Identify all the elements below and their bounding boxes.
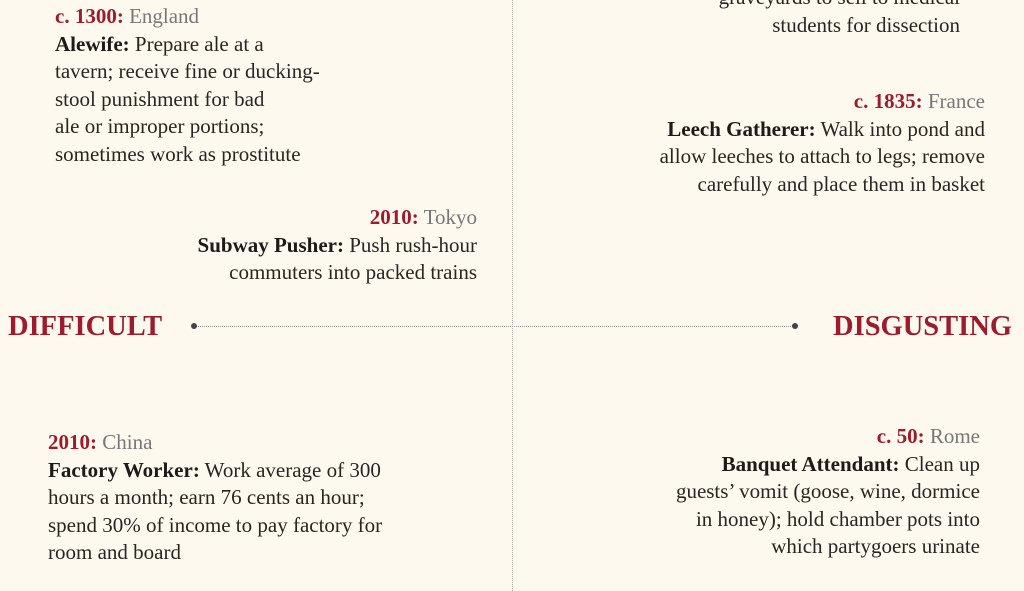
entry: factory worker: Factory Worker: Work average of 300 bbox=[48, 458, 381, 482]
entry: leech gatherer bbox=[660, 89, 985, 196]
entry: alewife: stool punishment for bad bbox=[55, 86, 264, 110]
entry: banquet attendant: guests’ vomit (goose, wine, dormice bbox=[676, 479, 980, 503]
entry: leech gatherer: Leech Gatherer: Walk into pond and bbox=[667, 116, 985, 140]
entry: banquet attendant: c. 50: Rome bbox=[877, 424, 980, 448]
entry: alewife: tavern; receive fine or ducking- bbox=[55, 59, 320, 83]
entry: grave robber (cut): students for dissection bbox=[772, 12, 960, 36]
entry: grave robber (cut) bbox=[719, 0, 960, 36]
entry: subway pusher: Subway Pusher: Push rush-hour bbox=[198, 232, 477, 256]
entry: factory worker: hours a month; earn 76 cents an hour; bbox=[48, 485, 365, 509]
entry: banquet attendant: in honey); hold chamber pots into bbox=[696, 506, 980, 530]
entry: subway pusher bbox=[198, 205, 477, 284]
label: difficult: DIFFICULT bbox=[8, 311, 162, 342]
entry: leech gatherer: allow leeches to attach to legs; remove bbox=[660, 144, 985, 168]
entry: factory worker: spend 30% of income to pay factory for bbox=[48, 512, 382, 536]
entry: alewife bbox=[55, 4, 320, 166]
entry: factory worker bbox=[48, 430, 382, 564]
entry: leech gatherer: c. 1835: France bbox=[854, 89, 985, 113]
horizontal axis bbox=[194, 326, 795, 327]
entry: alewife: c. 1300: England bbox=[55, 4, 199, 28]
entry: factory worker: 2010: China bbox=[48, 430, 152, 454]
axis dot right bbox=[792, 323, 798, 329]
entry: subway pusher: commuters into packed trains bbox=[229, 260, 477, 284]
entry: alewife: sometimes work as prostitute bbox=[55, 142, 301, 166]
entry: subway pusher: 2010: Tokyo bbox=[370, 205, 477, 229]
entry: factory worker: room and board bbox=[48, 540, 181, 564]
entry: leech gatherer: carefully and place them in basket bbox=[698, 172, 985, 196]
entry: banquet attendant bbox=[676, 424, 980, 558]
axis dot left bbox=[191, 323, 197, 329]
entry: alewife: Alewife: Prepare ale at a bbox=[55, 32, 264, 56]
vertical axis bbox=[512, 0, 513, 591]
label: disgusting: DISGUSTING bbox=[833, 311, 1012, 342]
entry: alewife: ale or improper portions; bbox=[55, 114, 264, 138]
entry: banquet attendant: Banquet Attendant: Clean up bbox=[722, 452, 980, 476]
entry: banquet attendant: which partygoers urinate bbox=[771, 534, 980, 558]
